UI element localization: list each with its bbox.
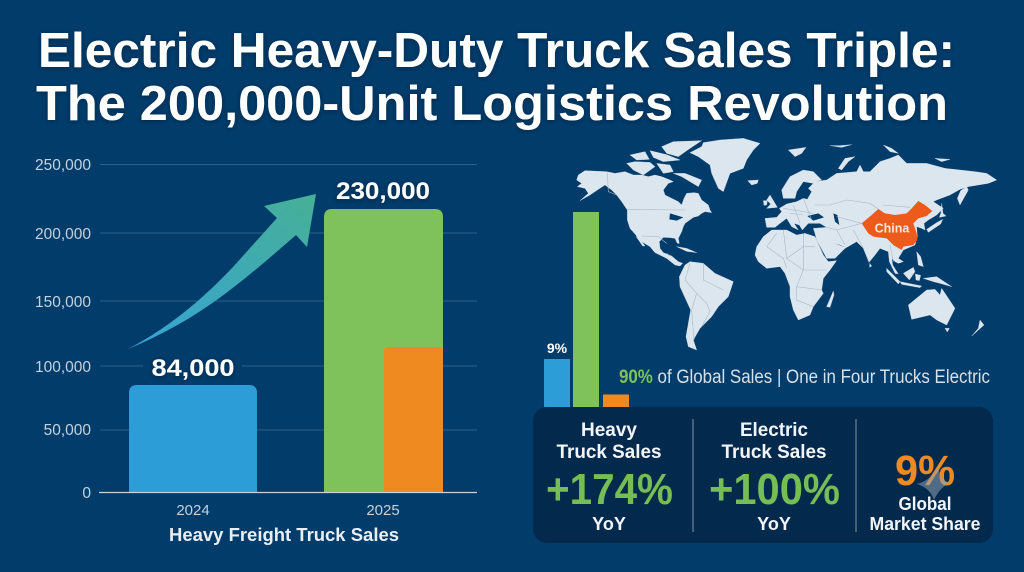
map: victoria island [627,162,655,175]
map: kamchatka [957,187,968,205]
bar: 2025 electric segment [384,347,443,492]
bar: 2024 [129,385,257,492]
stat: global market share [870,447,980,534]
x axis labels: 2025 [366,502,400,519]
stat: global market share: Market Share [870,514,980,534]
mini bar: orange [603,394,629,407]
value label: 84,000: 84,000 [152,355,234,382]
y axis labels: 250,000 [35,157,91,174]
map: sri lanka [870,263,872,267]
map: iceland [748,180,758,185]
map: devon island [650,151,680,162]
stat: heavy truck sales: YoY [592,514,626,534]
map: uk [767,195,777,208]
map: north america [577,171,712,266]
stat: electric truck sales: Truck Sales [722,442,826,463]
y axis labels: 0 [82,485,91,502]
map: ireland [763,201,767,205]
stat: global market share: Global [898,494,952,514]
bar chart: heavy freight truck sales [35,157,477,545]
map: greenland [690,138,760,192]
map: japan [927,219,943,232]
y axis labels: 100,000 [35,359,91,376]
map: tasmania [945,328,949,332]
bar: 2025 total [324,209,443,492]
map: sumatra [887,268,900,284]
map: cuba [677,247,697,253]
stat: heavy truck sales [546,420,673,534]
map: madagascar [827,291,834,307]
map: svalbard [788,147,806,157]
map: eurasia [765,155,997,274]
stat: heavy truck sales: Truck Sales [556,442,662,463]
stat: heavy truck sales: +174% [546,465,673,514]
arrow: growth [127,194,316,350]
panel: key statistics [533,407,993,543]
y axis labels: 200,000 [35,226,91,243]
map: new zealand [972,320,984,336]
stat: heavy truck sales: Heavy [581,420,637,441]
mini bar label: 9% [547,340,568,356]
y axis labels: 150,000 [35,294,91,311]
chart caption: Heavy Freight Truck Sales [169,525,399,545]
mini bar: blue [544,359,570,407]
map caption: 90% of Global Sales | One in Four Trucks Electric [619,367,990,388]
map: new siberian islands [935,158,950,162]
map: country borders [607,173,910,340]
x axis labels [176,502,400,519]
stat: electric truck sales: YoY [757,514,791,534]
map: new guinea [923,277,952,287]
stat: electric truck sales [709,420,840,534]
map: china highlighted [862,201,932,250]
map label: china: China [875,221,910,236]
map: sulawesi [915,274,921,281]
title [36,23,955,131]
map: south america [679,262,733,350]
title: Electric Heavy-Duty Truck Sales Triple: [38,23,955,78]
map: borneo [903,267,915,280]
y axis labels: 50,000 [44,422,91,439]
stat: electric truck sales: +100% [709,465,840,514]
map: baffin island [673,173,702,187]
map: africa [755,230,837,320]
map: java [900,282,922,288]
map: inland water [669,213,845,247]
title: The 200,000-Unit Logistics Revolution [36,76,948,131]
map: somerset island [657,163,673,173]
map: sakhalin and hokkaido [939,203,946,217]
map: australia [908,288,955,325]
map: novaya zemlya [838,157,855,170]
map: banks island [630,152,649,160]
x axis labels: 2024 [176,502,210,519]
y axis labels [35,157,91,502]
value label: 230,000: 230,000 [336,178,430,205]
map: philippines [917,252,923,267]
stat: electric truck sales: Electric [740,420,808,441]
map: baja california [636,234,645,246]
map: ellesmere island [662,141,702,157]
world map [577,138,997,350]
map: severnaya zemlya [883,145,898,153]
mini bar chart [544,212,629,407]
map: franz josef land [830,145,852,147]
mini bar: green [573,212,599,407]
icon: sparkle [917,466,950,500]
stat: global market share: 9% [895,447,955,495]
